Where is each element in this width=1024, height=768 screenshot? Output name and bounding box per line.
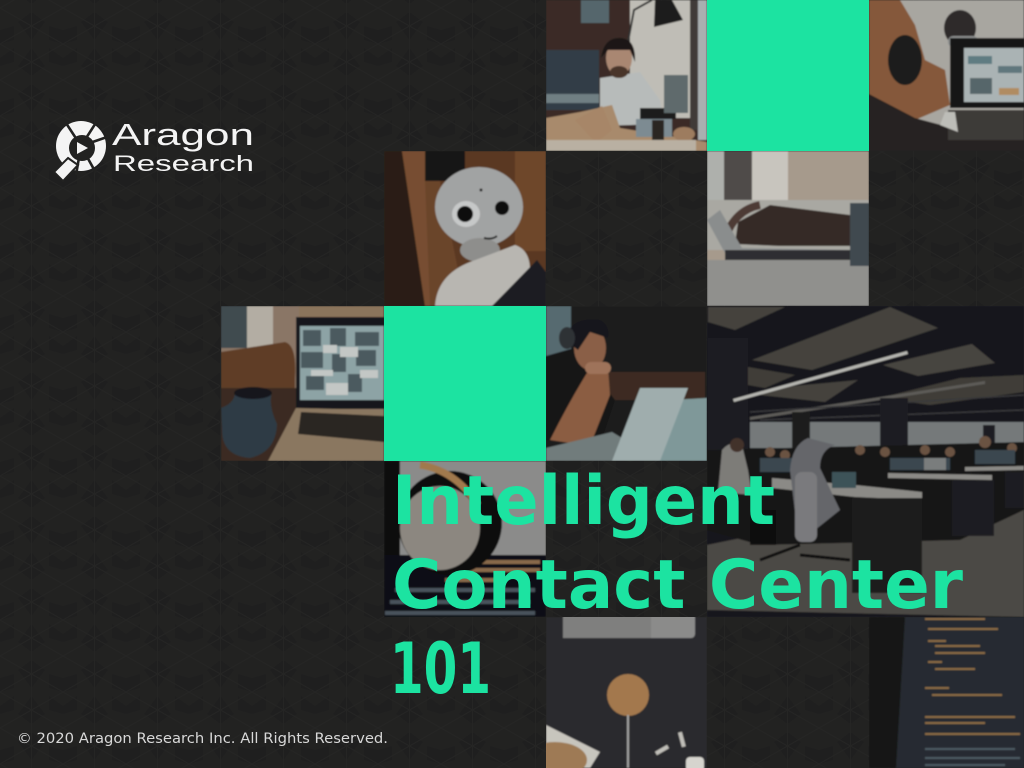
logo wordmark [112, 117, 254, 176]
green square: top [707, 0, 869, 151]
photo: laptop with video call and mug [221, 306, 384, 461]
photo: ring on keyboard [384, 461, 546, 617]
logo wordmark: Research [113, 151, 254, 176]
photo: code on screen [869, 617, 1024, 768]
photo: agent wearing headset at monitor [869, 0, 1024, 141]
title: 101 [390, 628, 491, 710]
photo: open-plan contact center floor [707, 306, 1024, 617]
photo: man at desk with headphones [546, 0, 707, 151]
icon: aragon wheel with play button [54, 118, 110, 181]
green square: center [384, 306, 546, 461]
logo: Aragon Research [54, 117, 254, 181]
photo: white humanoid robot [384, 151, 546, 306]
title [390, 462, 963, 710]
logo wordmark: Aragon [112, 117, 254, 152]
photo: hands typing on laptop [707, 151, 869, 306]
title: Contact Center [392, 546, 963, 625]
title: Intelligent [392, 462, 775, 541]
copyright footer: © 2020 Aragon Research Inc. All Rights Reserved. [17, 731, 388, 747]
photo: smart speaker on dark desk [546, 617, 706, 768]
photo: man thinking at laptop [546, 306, 707, 461]
